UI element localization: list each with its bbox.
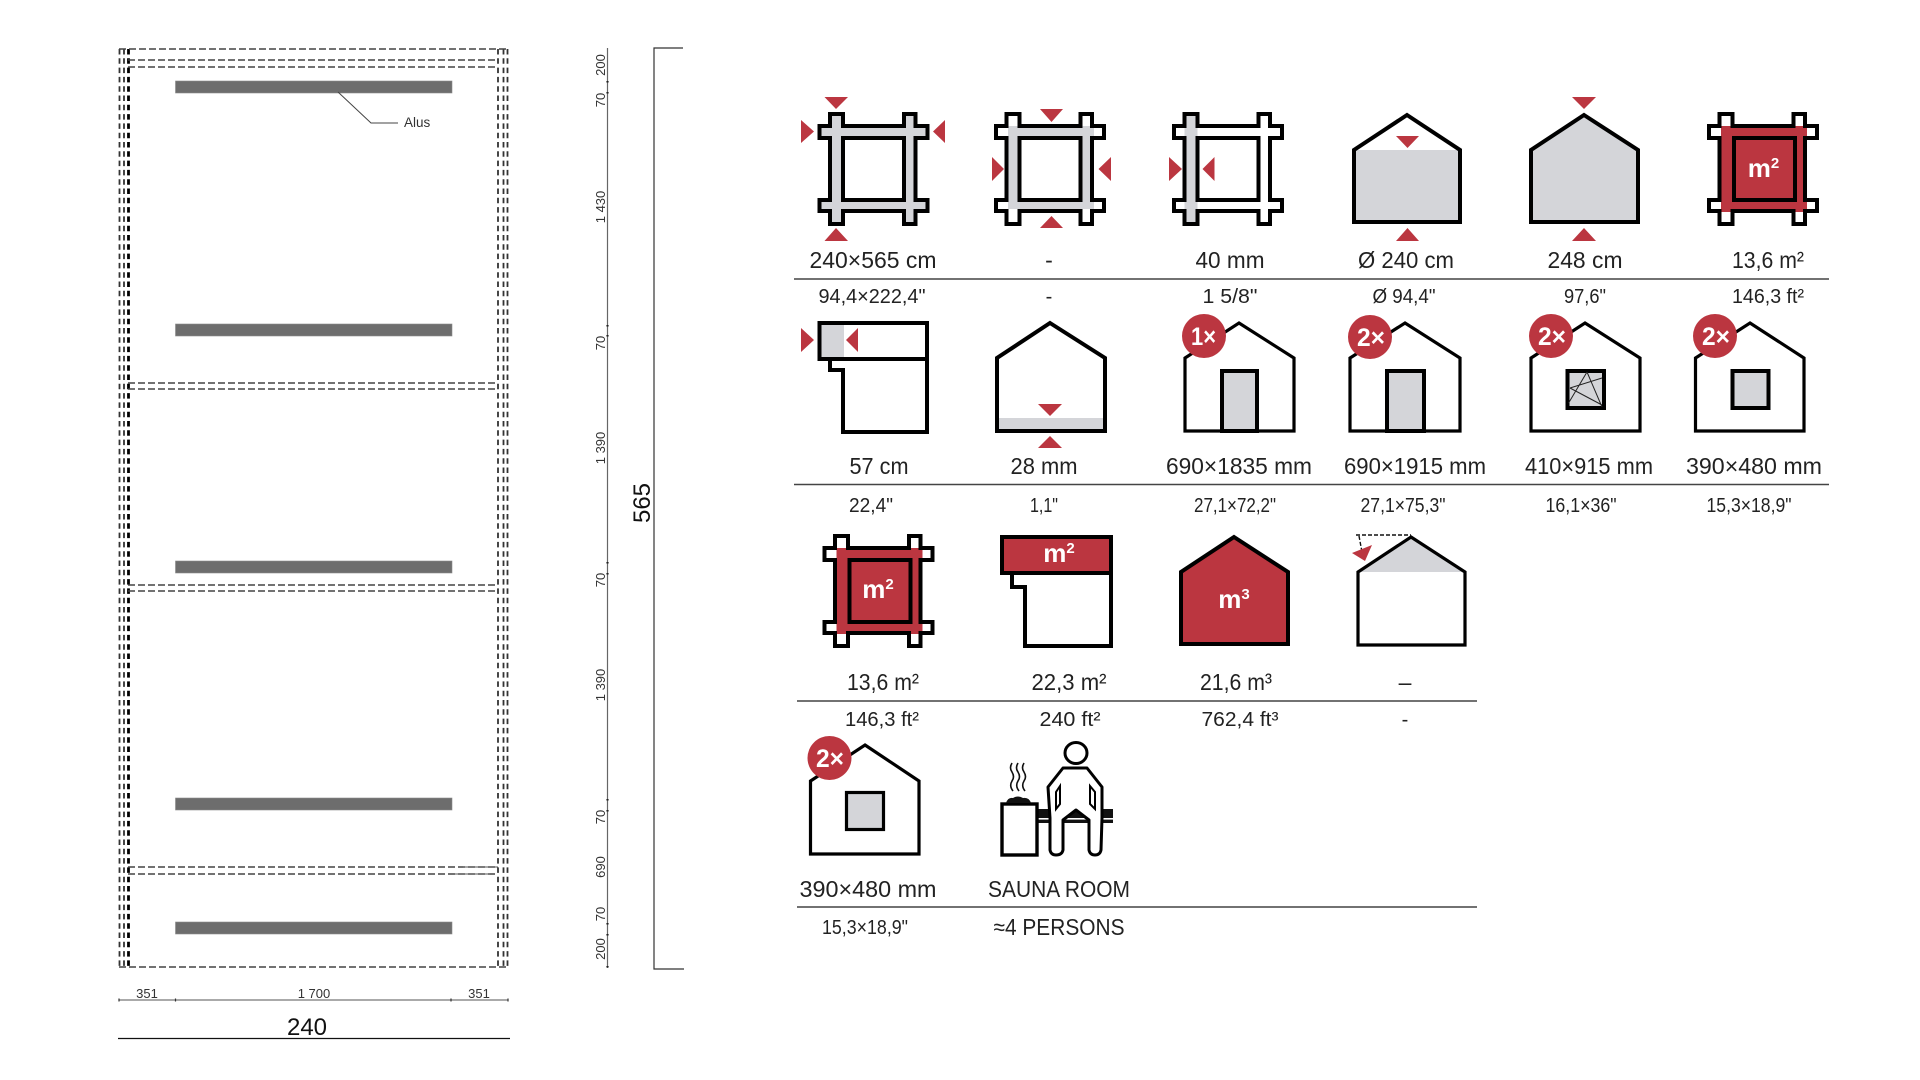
width dimension: 351: [468, 986, 490, 1001]
icon: floor area outer: 2: [1771, 155, 1779, 172]
icon: sauna room person: [1002, 742, 1113, 855]
labels row 1: 97,6": [1564, 286, 1606, 308]
icon: wall thickness: [1169, 114, 1282, 224]
overall height bracket: 565: [629, 483, 656, 523]
labels row 2: 22,4": [849, 495, 893, 517]
labels row 4: 15,3×18,9": [822, 917, 908, 939]
labels row 2: 1,1": [1030, 495, 1058, 517]
height dimension chain: 200: [593, 54, 608, 76]
icon: floor area inner: m: [862, 574, 885, 604]
width dimension: 351: [136, 986, 158, 1001]
icon: doors 2x: [1348, 315, 1460, 431]
icon: stove: [1002, 796, 1037, 855]
badge: 2x: 2×: [816, 745, 844, 773]
row 2 specifications: [801, 314, 1822, 517]
icon: person: [1048, 742, 1102, 855]
width dimension: 1 700: [298, 986, 330, 1001]
labels row 2: 16,1×36": [1546, 495, 1616, 517]
callout: Alus: [338, 92, 431, 130]
height dimension chain: 690: [593, 856, 608, 878]
icon: terrace area: m: [1043, 538, 1066, 568]
labels row 1: -: [1046, 286, 1052, 308]
labels row 3: 22,3 m²: [1032, 669, 1107, 695]
labels row 4: [800, 876, 1130, 940]
labels row 1: 40 mm: [1196, 247, 1264, 273]
bench bar 2: [176, 324, 452, 336]
height dimension chain: 70: [593, 93, 608, 107]
icon: floor thickness: [997, 323, 1105, 448]
labels row 3: 21,6 m³: [1200, 669, 1272, 695]
icon: tilt window 2x: [1529, 314, 1640, 431]
labels row 2: 57 cm: [850, 453, 908, 479]
badge: 2x: 2×: [1702, 323, 1730, 351]
labels row 2: 28 mm: [1010, 453, 1078, 479]
labels row 2: 15,3×18,9": [1706, 495, 1792, 517]
row 3 specifications: [824, 535, 1465, 731]
width dimension: 240: [287, 1014, 327, 1041]
icon: roof window 2x: [808, 736, 919, 854]
labels row 2: [849, 453, 1822, 517]
overall height bracket: [629, 48, 684, 969]
labels row 3: 762,4 ft³: [1202, 709, 1279, 731]
labels row 3: 146,3 ft²: [845, 709, 919, 731]
icon: room volume: [1181, 537, 1288, 644]
icon: fixed window 2x: [1693, 314, 1804, 431]
row rules: [794, 279, 1829, 907]
icon: floor area inner: 2: [885, 576, 894, 593]
labels row 3: [845, 669, 1412, 731]
icon: wall height: [1354, 115, 1460, 241]
icon: room volume: m: [1218, 584, 1241, 614]
labels row 1: -: [1045, 247, 1053, 273]
labels row 1: Ø 94,4": [1372, 286, 1436, 308]
labels row 1: 146,3 ft²: [1732, 286, 1804, 308]
icon: inner footprint: [992, 109, 1111, 228]
height dimension chain: 70: [593, 907, 608, 921]
labels row 2: 27,1×72,2": [1194, 495, 1276, 517]
icon: floor area outer: m: [1748, 153, 1771, 183]
row 1 specifications: [801, 97, 1817, 308]
labels row 1: 240×565 cm: [810, 247, 936, 273]
callout: Alus: Alus: [404, 115, 431, 130]
labels row 2: 690×1915 mm: [1344, 453, 1486, 479]
icon: floor area inner: [824, 536, 932, 646]
bench bar 5: [176, 922, 452, 934]
labels row 3: 13,6 m²: [847, 669, 919, 695]
labels row 1: [810, 247, 1804, 308]
bench bar 1: [176, 81, 452, 93]
icon: roof slope: [1352, 535, 1465, 645]
icon: terrace area: [1002, 537, 1111, 646]
labels row 2: 690×1835 mm: [1166, 453, 1312, 479]
row 4 specifications: [800, 736, 1130, 940]
height dimension chain: 1 430: [593, 191, 608, 223]
badge: 1x: 1×: [1191, 323, 1216, 351]
panel: floor plan: [119, 49, 508, 967]
height dimension chain: 1 390: [593, 432, 608, 464]
labels row 1: 1 5/8": [1202, 286, 1258, 308]
height dimension chain: [593, 48, 608, 968]
icon: steam: [1010, 763, 1026, 791]
height dimension chain: 70: [593, 573, 608, 587]
height dimension chain: 70: [593, 336, 608, 350]
icon: ridge height: [1531, 97, 1638, 241]
width dimension: [118, 986, 510, 1041]
labels row 3: 240 ft²: [1040, 709, 1101, 731]
bench bar 4: [176, 798, 452, 810]
bench bar 3: [176, 561, 452, 573]
labels row 1: Ø 240 cm: [1358, 247, 1454, 273]
icon: floor area outer: [1709, 114, 1817, 224]
icon: room volume: 3: [1241, 586, 1250, 603]
icon: terrace depth: [801, 323, 927, 432]
icon: bench: [1038, 809, 1113, 823]
icon: front door: [1182, 314, 1294, 431]
badge: 2x: 2×: [1357, 324, 1385, 352]
height dimension chain: 1 390: [593, 669, 608, 701]
labels row 2: 390×480 mm: [1686, 453, 1822, 479]
icon: terrace area: 2: [1066, 540, 1075, 557]
icon: outer footprint: [801, 97, 945, 241]
labels row 4: SAUNA ROOM: [988, 876, 1130, 902]
labels row 1: 94,4×222,4": [818, 286, 926, 308]
height dimension chain: 200: [593, 938, 608, 960]
labels row 4: 390×480 mm: [800, 876, 936, 902]
badge: 2x: 2×: [1538, 323, 1566, 351]
labels row 2: 27,1×75,3": [1360, 495, 1446, 517]
labels row 4: ≈4 PERSONS: [994, 914, 1124, 940]
labels row 1: 248 cm: [1548, 247, 1622, 273]
labels row 3: -: [1402, 709, 1408, 731]
height dimension chain: 70: [593, 810, 608, 824]
labels row 2: 410×915 mm: [1525, 453, 1653, 479]
labels row 1: 13,6 m²: [1732, 247, 1804, 273]
labels row 3: –: [1399, 669, 1412, 695]
